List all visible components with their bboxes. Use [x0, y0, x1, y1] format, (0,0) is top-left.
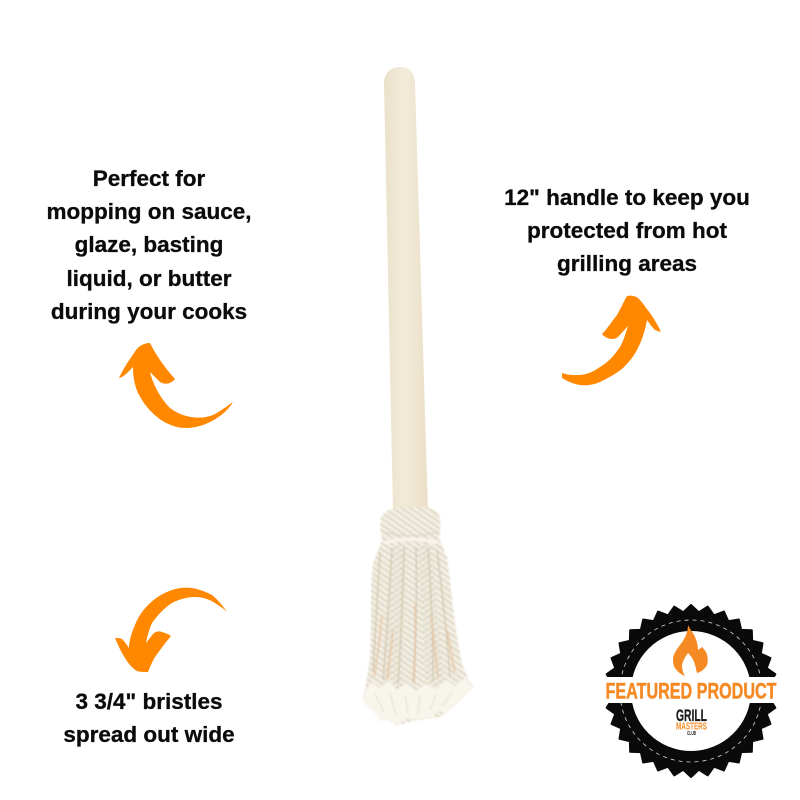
- mop bristles: [363, 540, 473, 725]
- badge scalloped black seal: [591, 591, 791, 791]
- text: mopping uses: during your cooks: [51, 299, 247, 324]
- text: mopping uses: glaze, basting: [75, 232, 223, 257]
- arrow: top left, curving up toward text: [119, 343, 233, 428]
- text: bristle size: 3 3/4" bristles: [76, 689, 222, 714]
- text: mopping uses: Perfect for: [93, 166, 205, 191]
- mop collar: [380, 507, 440, 545]
- text: handle length: [504, 185, 750, 276]
- logo: Grill Masters Club: CLUB: [687, 731, 696, 737]
- logo: Grill Masters Club: MASTERS: [676, 722, 707, 732]
- badge stitched ring: [620, 620, 762, 762]
- product: basting mop: [363, 67, 473, 725]
- text: bristle size: spread out wide: [63, 722, 235, 747]
- text: handle length: protected from hot: [527, 218, 727, 243]
- text: mopping uses: mopping on sauce,: [46, 199, 252, 224]
- icon: flame: [673, 625, 708, 676]
- text: handle length: grilling areas: [557, 251, 697, 276]
- text: handle length: 12" handle to keep you: [504, 185, 750, 210]
- mop frayed tips: [363, 678, 473, 725]
- text: mopping uses: liquid, or butter: [66, 266, 231, 291]
- arrow: top right, curving up toward text: [562, 296, 661, 385]
- text: bristle size: [63, 689, 235, 747]
- badge white centre: [631, 631, 751, 751]
- badge white band: [600, 677, 782, 703]
- badge: featured product: [591, 591, 791, 791]
- mop handle: [384, 67, 428, 512]
- text: mopping uses: [46, 166, 252, 324]
- arrow: bottom left, curving down toward text: [115, 588, 227, 672]
- logo: Grill Masters Club: GRILL: [676, 706, 707, 725]
- logo: Grill Masters Club: [676, 706, 707, 737]
